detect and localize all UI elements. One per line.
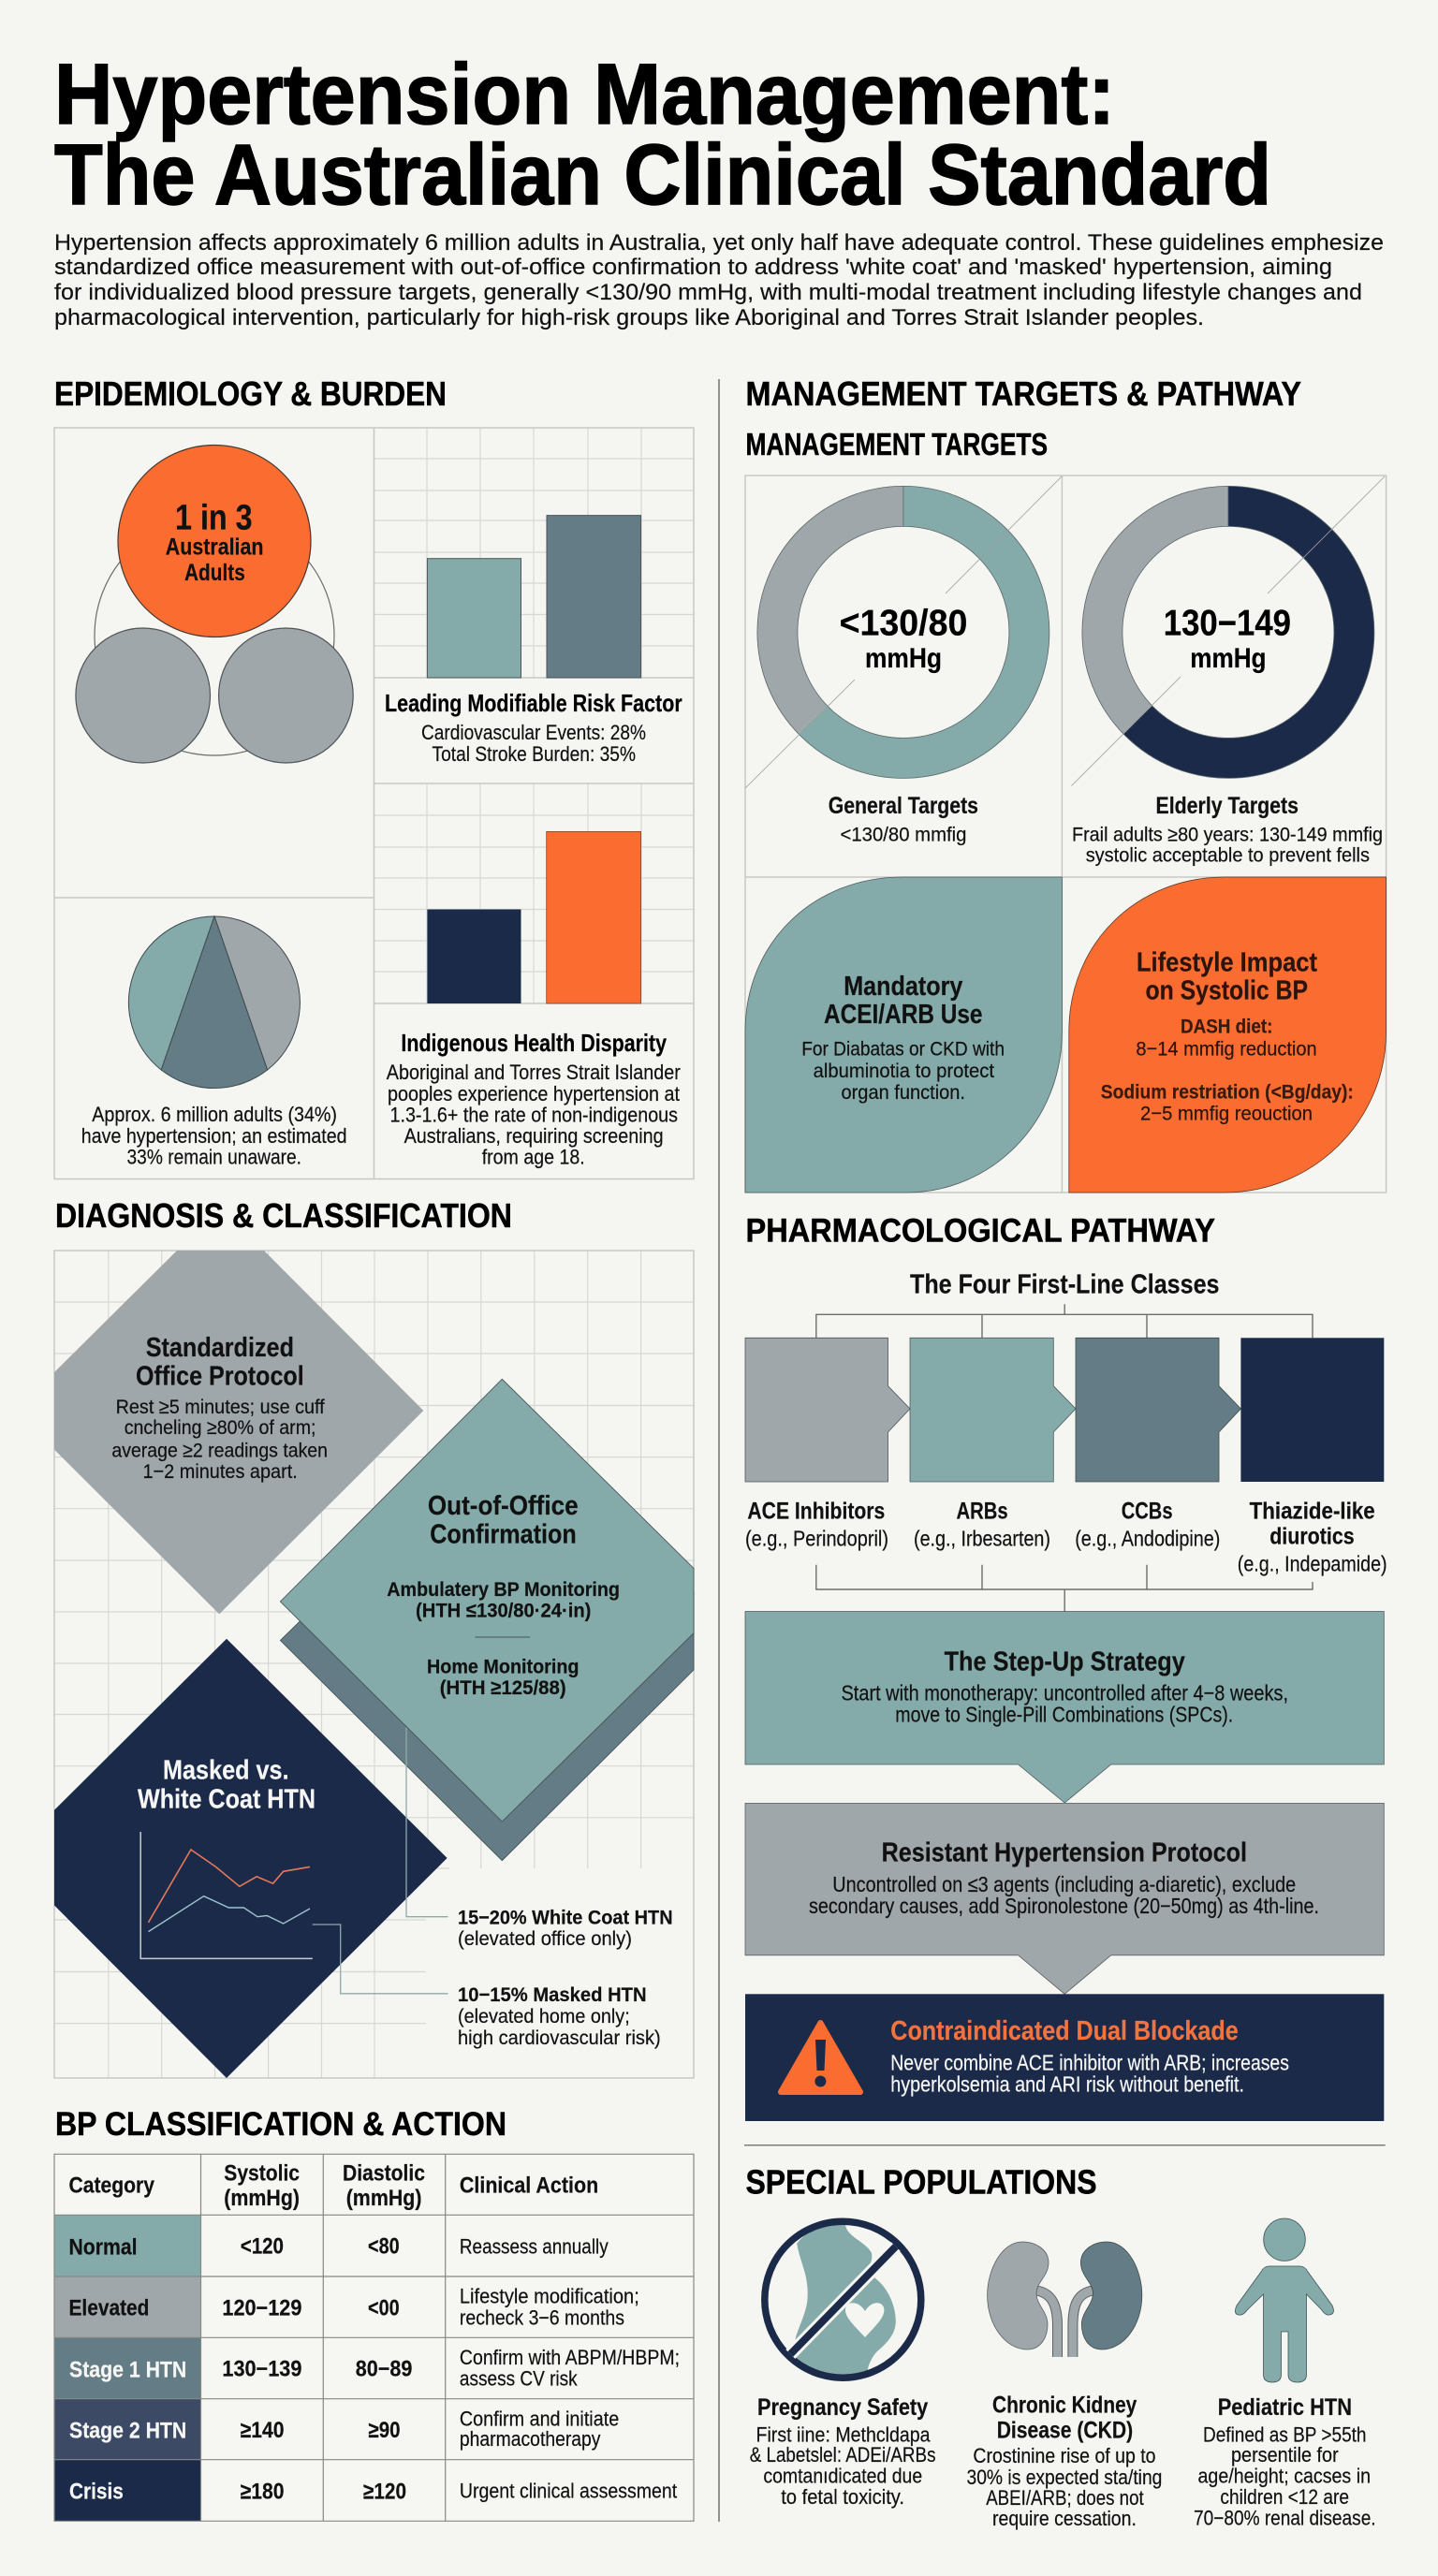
panel: lifestyle impact on systolic BP: DASH diet:: [1181, 1016, 1272, 1038]
box: contraindicated dual blockade: Never combine ACE inhibitor with ARB; increases: [890, 2051, 1289, 2075]
table row: normal: <120: [241, 2234, 284, 2260]
diamond: masked vs white coat: Masked vs.: [163, 1756, 289, 1786]
table row: stage 1: 80−89: [356, 2357, 412, 2382]
text: prevalence caption: Approx. 6 million adults (34%): [92, 1103, 337, 1126]
text: indigenous health disparity: [387, 1029, 681, 1169]
flowchart: first-line classes: [745, 1270, 1387, 1612]
box: step-up strategy: Start with monotherapy: uncontrolled after 4−8 weeks,: [841, 1681, 1288, 1705]
diamond: out-of-office confirmation: Home Monitoring: [427, 1655, 579, 1677]
table row: stage 2: ≥90: [369, 2418, 401, 2443]
donut: general targets: [745, 476, 1062, 788]
panel: lifestyle impact on systolic BP: Sodium restriation (<Bg/day):: [1101, 1081, 1354, 1104]
table row: normal: <80: [368, 2234, 400, 2260]
table header row: Category: [69, 2174, 155, 2199]
box: ACE inhibitors: (e.g., Perindopril): [745, 1527, 888, 1551]
table row: elevated: Lifestyle modification;: [460, 2285, 639, 2308]
heading: BP classification and action: BP CLASSIFICATION & ACTION: [55, 2106, 506, 2143]
title: The Australian Clinical Standard: [54, 127, 1271, 223]
panel: chronic kidney disease: Disease (CKD): [997, 2417, 1133, 2443]
panel: pediatric HTN: children <12 are: [1220, 2485, 1349, 2509]
panel: epidemiology and burden: [54, 428, 694, 1179]
callout: masked HTN: [313, 1925, 661, 2049]
icon: child figure: [1235, 2218, 1333, 2382]
table row: elevated: [69, 2285, 639, 2329]
text: elderly targets: Frail adults ≥80 years: 130-149 mmfig: [1072, 824, 1383, 846]
heading: special populations: SPECIAL POPULATIONS: [745, 2162, 1097, 2201]
box: step-up strategy: move to Single-Pill Combinations (SPCs).: [895, 1702, 1233, 1726]
table row: stage 2: Confirm and initiate: [460, 2407, 619, 2430]
panel: mandatory ACEI/ARB use: For Diabatas or CKD with: [801, 1038, 1005, 1061]
table row: crisis: ≥120: [363, 2479, 406, 2504]
panel: chronic kidney disease: ABEI/ARB; does not: [986, 2486, 1144, 2510]
panel: chronic kidney disease: [966, 2242, 1162, 2530]
panel: pediatric HTN: [1194, 2218, 1376, 2530]
heading: epidemiology and burden: EPIDEMIOLOGY & BURDEN: [54, 374, 447, 413]
panel: pregnancy safety: comtanıdicated due: [763, 2465, 922, 2488]
text: indigenous health disparity: from age 18.: [482, 1146, 585, 1169]
panel: lifestyle impact on systolic BP: on Systolic BP: [1146, 975, 1308, 1005]
callout: white coat HTN: (elevated office only): [458, 1927, 632, 1950]
heading: pharmacological pathway: PHARMACOLOGICAL PATHWAY: [745, 1213, 1215, 1250]
box: resistant hypertension protocol: Resistant Hypertension Protocol: [882, 1838, 1247, 1868]
diamond: standardized office protocol: Office Protocol: [136, 1361, 304, 1391]
box: step-up strategy: [745, 1612, 1384, 1803]
callout: masked HTN: 10−15% Masked HTN: [458, 1983, 647, 2006]
panel: pediatric HTN: age/height; cacses in: [1198, 2465, 1371, 2488]
diamond: out-of-office confirmation: Out-of-Office: [428, 1491, 579, 1521]
box: CCBs: (e.g., Andodipine): [1075, 1527, 1220, 1551]
box: thiazide-like diuretics: [1238, 1338, 1387, 1575]
box: thiazide-like diuretics: diurotics: [1269, 1523, 1355, 1549]
donut: general targets: mmHg: [865, 643, 942, 674]
panel: mandatory ACEI/ARB use: Mandatory: [844, 972, 962, 1002]
callout: white coat HTN: 15−20% White Coat HTN: [458, 1907, 673, 1929]
donut: elderly targets: mmHg: [1190, 643, 1266, 674]
table header row: Systolic: [224, 2160, 300, 2186]
chart: indigenous disparity bars: [427, 831, 641, 1003]
text: indigenous health disparity: 1.3-1.6+ the rate of non-indigenous: [389, 1104, 678, 1127]
box: CCBs: [1075, 1338, 1240, 1551]
table header row: (mmHg): [346, 2186, 421, 2211]
diamond: standardized office protocol: cncheling ≥80% of arm;: [125, 1416, 316, 1439]
box: resistant hypertension protocol: [745, 1803, 1384, 1994]
panel: mandatory ACEI/ARB use: [745, 877, 1062, 1193]
diamond: out-of-office confirmation: (HTH ≥125/88): [440, 1676, 566, 1699]
chart: 1 in 3 adults circles: 1 in 3: [175, 498, 253, 537]
diamond: out-of-office confirmation: Confirmation: [430, 1519, 577, 1549]
flowchart: first-line classes: The Four First-Line Classes: [910, 1270, 1219, 1300]
table row: crisis: ≥180: [241, 2479, 285, 2504]
table row: stage 1: Stage 1 HTN: [69, 2357, 186, 2382]
table row: elevated: 120−129: [222, 2295, 301, 2320]
panel: mandatory ACEI/ARB use: organ function.: [841, 1081, 965, 1104]
table header row: Clinical Action: [460, 2174, 598, 2199]
table row: elevated: Elevated: [69, 2295, 149, 2320]
table row: normal: [69, 2234, 609, 2260]
table row: crisis: Urgent clinical assessment: [460, 2480, 677, 2503]
heading: management targets and pathway: MANAGEMENT TARGETS & PATHWAY: [745, 374, 1301, 413]
panel: pediatric HTN: persentile for: [1231, 2443, 1339, 2466]
box: ARBs: [910, 1338, 1076, 1551]
box: contraindicated dual blockade: Contraindicated Dual Blockade: [890, 2016, 1239, 2046]
box: step-up strategy: The Step-Up Strategy: [945, 1647, 1185, 1676]
text: leading modifiable risk factor: Total Stroke Burden: 35%: [433, 742, 636, 766]
diamond: standardized office protocol: 1−2 minutes apart.: [142, 1460, 298, 1483]
text: prevalence caption: [81, 1103, 347, 1169]
text: prevalence caption: have hypertension; an estimated: [81, 1124, 347, 1148]
box: ACE inhibitors: ACE Inhibitors: [747, 1499, 885, 1525]
title: [54, 47, 1271, 223]
title: Hypertension Management:: [54, 47, 1115, 142]
panel: pregnancy safety: to fetal toxicity.: [781, 2485, 904, 2509]
text: elderly targets: [1072, 793, 1383, 866]
donut: elderly targets: [1071, 476, 1385, 786]
table row: stage 2: pharmacotherapy: [460, 2427, 601, 2451]
table: BP classification: [54, 2154, 694, 2521]
text: general targets: General Targets: [829, 793, 978, 819]
table row: crisis: [69, 2479, 677, 2504]
box: contraindicated dual blockade: hyperkolsemia and ARI risk without benefit.: [890, 2072, 1244, 2097]
text: general targets: [829, 793, 978, 846]
chart: 1 in 3 adults circles: Adults: [184, 560, 245, 586]
intro text block: for individualized blood pressure targets, generally <130/90 mmHg, with multi-modal treatment including lifestyle changes and: [54, 280, 1362, 305]
text: elderly targets: Elderly Targets: [1155, 793, 1299, 819]
chart: risk factor bars: [427, 516, 641, 678]
callout: masked HTN: (elevated home only;: [458, 2005, 630, 2027]
diamond: masked vs white coat: [54, 1639, 448, 2078]
panel: mandatory ACEI/ARB use: albuminotia to protect: [814, 1060, 994, 1082]
diamond: standardized office protocol: [54, 1251, 423, 1614]
text: general targets: <130/80 mmfig: [841, 824, 966, 846]
panel: pregnancy safety: & Labetslel: ADEi/ARBs: [750, 2443, 936, 2466]
table row: stage 1: [69, 2346, 680, 2390]
table row: normal: Normal: [69, 2234, 137, 2260]
table row: stage 1: Confirm with ABPM/HBPM;: [460, 2346, 680, 2369]
callout: masked HTN: high cardiovascular risk): [458, 2027, 661, 2049]
table header row: (mmHg): [224, 2186, 300, 2211]
diamond: masked vs white coat: White Coat HTN: [138, 1784, 315, 1814]
table row: normal: Reassess annually: [460, 2235, 609, 2259]
panel: lifestyle impact on systolic BP: 8−14 mmfig reduction: [1136, 1038, 1317, 1061]
chart: prevalence pie: [128, 916, 300, 1089]
text: prevalence caption: 33% remain unaware.: [127, 1146, 301, 1169]
panel: pediatric HTN: 70−80% renal disease.: [1194, 2507, 1376, 2530]
box: ARBs: ARBs: [957, 1499, 1008, 1525]
table row: stage 1: 130−139: [222, 2357, 301, 2382]
donut: general targets: <130/80: [840, 604, 967, 644]
table row: elevated: recheck 3−6 months: [460, 2305, 624, 2329]
text: indigenous health disparity: Indigenous Health Disparity: [401, 1029, 667, 1057]
table row: stage 2: ≥140: [241, 2418, 285, 2443]
chart: office vs home BP lines: [140, 1832, 313, 1958]
panel: pediatric HTN: Pediatric HTN: [1218, 2394, 1352, 2421]
icon: warning triangle: [781, 2023, 860, 2092]
diamond: standardized office protocol: Standardized: [146, 1333, 294, 1363]
text: elderly targets: systolic acceptable to prevent fells: [1086, 843, 1370, 866]
diamond: standardized office protocol: Rest ≥5 minutes; use cuff: [116, 1396, 325, 1418]
panel: chronic kidney disease: require cessation.: [992, 2507, 1137, 2530]
panel: pregnancy safety: First iine: Methcldapa: [756, 2422, 931, 2446]
panel: lifestyle impact on systolic BP: 2−5 mmfig reouction: [1140, 1103, 1313, 1125]
box: thiazide-like diuretics: Thiazide-like: [1250, 1499, 1375, 1525]
text: leading modifiable risk factor: Cardiovascular Events: 28%: [421, 721, 646, 744]
table header row: Diastolic: [343, 2160, 425, 2186]
panel: chronic kidney disease: Chronic Kidney: [992, 2393, 1137, 2419]
diamond: out-of-office confirmation: (HTH ≤130/80·24·in): [416, 1599, 591, 1621]
subheading: management targets: MANAGEMENT TARGETS: [745, 427, 1048, 461]
table row: stage 1: assess CV risk: [460, 2366, 579, 2390]
intro text block: Hypertension affects approximately 6 million adults in Australia, yet only half have adequate control. These guidelines emphesize: [54, 230, 1384, 256]
table row: stage 2: [69, 2407, 619, 2451]
intro text block: standardized office measurement with out-of-office confirmation to address 'white coat' and 'masked' hypertension, aiming: [54, 255, 1332, 280]
box: resistant hypertension protocol: secondary causes, add Spironolestone (20−50mg) as 4th-line.: [809, 1894, 1319, 1918]
diamond: standardized office protocol: average ≥2 readings taken: [111, 1440, 328, 1462]
panel: pediatric HTN: Defined as BP >55th: [1203, 2422, 1367, 2446]
diamond: out-of-office confirmation: [280, 1379, 694, 1861]
panel: diagnosis and classification: [54, 1251, 694, 2078]
icon: kidneys: [988, 2242, 1142, 2357]
box: ACE inhibitors: [745, 1338, 910, 1551]
diamond: out-of-office confirmation: Ambulatery BP Monitoring: [387, 1578, 620, 1601]
table row: stage 2: Stage 2 HTN: [69, 2418, 186, 2443]
table row: elevated: <00: [368, 2295, 400, 2320]
panel: lifestyle impact on systolic BP: [1069, 877, 1387, 1193]
text: indigenous health disparity: Aboriginal and Torres Strait Islander: [387, 1061, 681, 1084]
callout: white coat HTN: [406, 1728, 673, 1950]
table row: crisis: Crisis: [69, 2479, 124, 2504]
panel: chronic kidney disease: 30% is expected sta/ting: [966, 2466, 1162, 2489]
box: contraindicated dual blockade: [745, 1994, 1384, 2121]
text: leading modifiable risk factor: Leading Modifiable Risk Factor: [385, 689, 682, 717]
text: indigenous health disparity: Australians, requiring screening: [404, 1124, 664, 1148]
intro text block: pharmacological intervention, particularly for high-risk groups like Aboriginal and Torres Strait Islander peoples.: [54, 305, 1204, 330]
heading: diagnosis and classification: DIAGNOSIS & CLASSIFICATION: [55, 1196, 512, 1235]
box: CCBs: CCBs: [1122, 1499, 1172, 1525]
box: thiazide-like diuretics: (e.g., Indepamide): [1238, 1551, 1387, 1575]
text: leading modifiable risk factor: [385, 689, 682, 766]
icon: pregnancy prohibited: [765, 2221, 921, 2379]
panel: management targets: [745, 476, 1387, 1193]
panel: chronic kidney disease: Crostinine rise of up to: [973, 2444, 1155, 2467]
panel: pregnancy safety: Pregnancy Safety: [757, 2394, 928, 2421]
box: ARBs: (e.g., Irbesarten): [914, 1527, 1050, 1551]
panel: pregnancy safety: [750, 2221, 936, 2509]
donut: elderly targets: 130−149: [1164, 604, 1291, 644]
intro text block: [54, 230, 1384, 330]
box: resistant hypertension protocol: Uncontrolled on ≤3 agents (including a-diaretic), exclude: [832, 1872, 1296, 1896]
table header row: [69, 2160, 598, 2211]
panel: lifestyle impact on systolic BP: Lifestyle Impact: [1137, 947, 1317, 977]
chart: 1 in 3 adults circles: Australian: [166, 534, 264, 560]
panel: mandatory ACEI/ARB use: ACEI/ARB Use: [824, 1000, 983, 1030]
chart: 1 in 3 adults circles: [76, 446, 353, 763]
text: indigenous health disparity: pooples experience hypertension at: [388, 1082, 680, 1105]
